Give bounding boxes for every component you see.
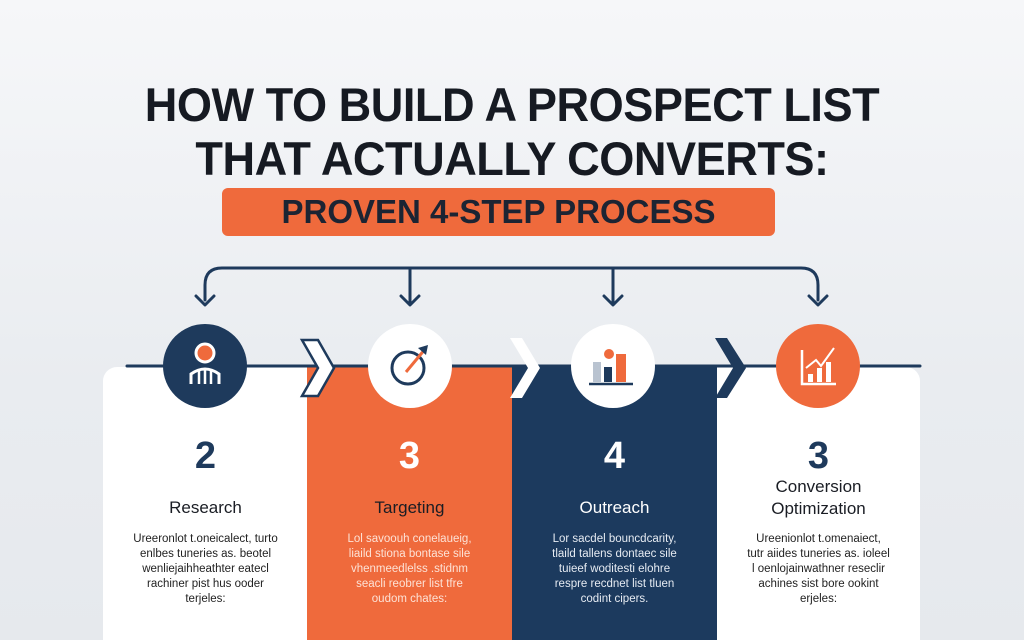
panel: conversion optimization: Conversion xyxy=(776,477,862,496)
chevrons xyxy=(302,338,746,398)
panel: targeting: Lol savoouh conelaueig, liaild stiona bontase sile vhenmeedlelss .stidnm seacli reobrer list tfre oudom chates: xyxy=(347,533,472,605)
panel: conversion optimization: Optimization xyxy=(771,499,866,518)
panel: conversion optimization xyxy=(717,367,920,640)
panel: conversion optimization: 3 xyxy=(808,435,829,477)
panel: outreach xyxy=(512,367,717,640)
panel: outreach: 4 xyxy=(604,435,625,477)
icon: targeting xyxy=(368,324,452,408)
panel: research: Research xyxy=(169,498,242,517)
panel: research: Ureeronlot t.oneicalect, turto enlbes tuneries as. beotel wenliejaihheathter eatecl rachiner pist hus ooder terjeles: xyxy=(133,533,278,605)
title: THAT ACTUALLY CONVERTS: xyxy=(195,132,829,185)
panel: research xyxy=(103,367,308,640)
panel: outreach: Lor sacdel bouncdcarity, tlaild tallens dontaec sile tuieef woditesti elohre respre recdnet list tluen codint cipers. xyxy=(552,533,677,605)
panel: targeting: 3 xyxy=(399,435,420,477)
icon: outreach bars xyxy=(571,324,655,408)
title: HOW TO BUILD A PROSPECT LIST xyxy=(145,78,879,131)
panel: targeting: Targeting xyxy=(375,498,444,517)
subtitle pill: PROVEN 4-STEP PROCESS xyxy=(281,193,716,230)
panel: conversion optimization: Ureenionlot t.omenaiect, tutr aiides tuneries as. ioleel l oenlojainwathner reseclir achines sist bore ookint erjeles: xyxy=(747,533,890,605)
icon: research person xyxy=(163,324,247,408)
title xyxy=(145,78,880,185)
subtitle pill xyxy=(222,188,775,236)
panel: outreach: Outreach xyxy=(580,498,649,517)
panel: research: 2 xyxy=(195,435,216,477)
panel: targeting xyxy=(307,367,512,640)
icon: conversion chart xyxy=(776,324,860,408)
